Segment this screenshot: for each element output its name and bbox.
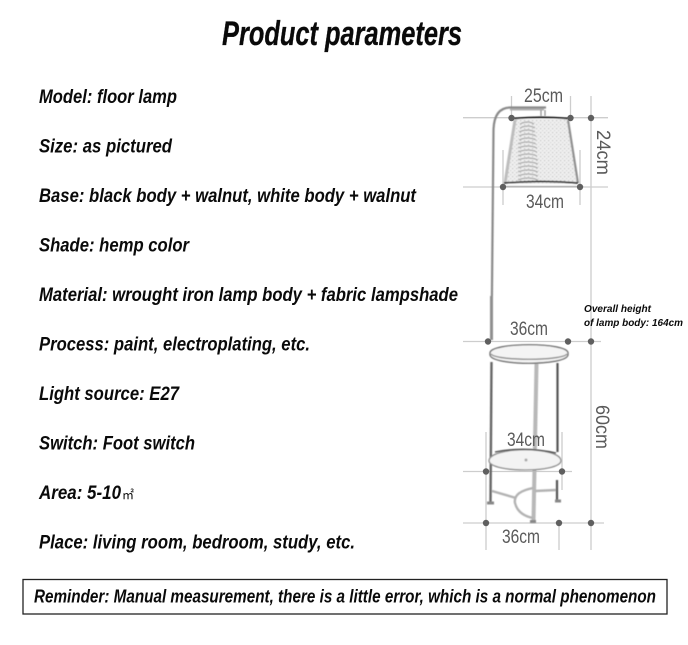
dimension label: shade height 24cm: 24cm — [592, 130, 613, 175]
overall height note — [584, 303, 683, 329]
parameter: place: Place: living room, bedroom, study, etc. — [39, 532, 355, 554]
parameter: area: ㎡ — [122, 488, 134, 502]
parameter: model: Model: floor lamp — [39, 87, 177, 108]
lamp diagram — [463, 86, 613, 550]
dimension guide lines — [463, 96, 608, 550]
parameter: process: Process: paint, electroplating, etc. — [39, 334, 310, 356]
parameter: shade: Shade: hemp color — [39, 236, 190, 256]
dimension label: shade top 25cm: 25cm — [524, 86, 563, 107]
lamp shade — [504, 117, 579, 186]
title: Product parameters — [222, 15, 462, 53]
parameter: area: Area: 5-10 — [38, 483, 121, 504]
dimension label: base 36cm: 36cm — [502, 527, 540, 548]
parameter: light source: Light source: E27 — [39, 384, 180, 405]
overall height note: Overall height — [584, 303, 651, 315]
lamp pole and arm — [492, 108, 546, 340]
table top — [490, 345, 568, 363]
reminder box — [23, 580, 667, 614]
lower shelf — [489, 449, 561, 470]
dimension label: table top 36cm: 36cm — [510, 319, 548, 340]
dimension dots — [483, 115, 594, 526]
parameter: base: Base: black body + walnut, white body + walnut — [39, 186, 417, 207]
parameter: material: Material: wrought iron lamp body + fabric lampshade — [39, 285, 458, 306]
overall height note: of lamp body: 164cm — [584, 317, 683, 329]
table legs — [490, 362, 558, 521]
parameter: size: Size: as pictured — [39, 136, 172, 158]
parameter: switch: Switch: Foot switch — [39, 434, 195, 454]
dimension label: table height 60cm: 60cm — [591, 405, 612, 449]
dimension label: shade bottom 34cm: 34cm — [526, 192, 564, 213]
lamp artwork — [487, 108, 579, 522]
dimension label: shelf 34cm: 34cm — [507, 430, 545, 451]
table base — [487, 488, 561, 522]
parameter list — [38, 87, 458, 554]
